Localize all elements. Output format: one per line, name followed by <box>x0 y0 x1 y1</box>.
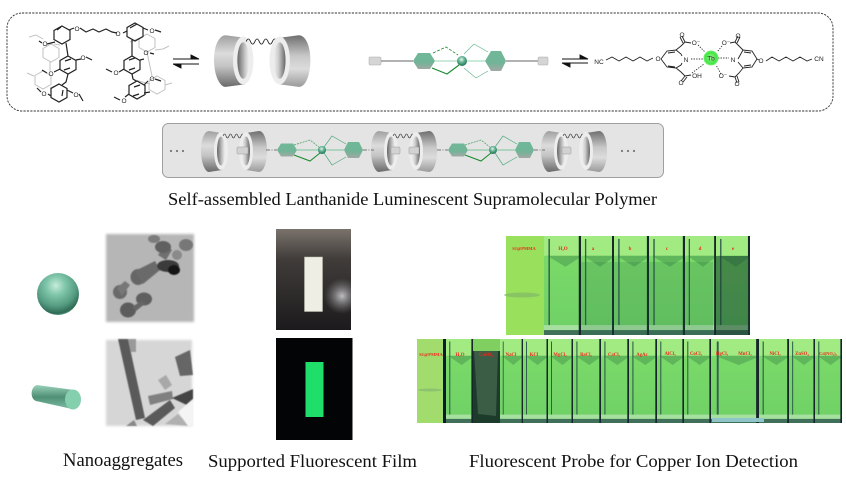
cuvette labels bottom: MgCl₂ <box>553 353 567 358</box>
label: probe: Fluorescent Probe for Copper Ion Detection <box>469 451 798 471</box>
panel: probe solvent photos <box>504 236 750 335</box>
pillararene structure: O <box>80 55 86 62</box>
TEM image: spherical aggregates <box>106 234 194 322</box>
terbium complex structure <box>594 32 824 88</box>
terbium complex structure: O <box>734 81 740 88</box>
terbium complex structure: O⁻ <box>692 40 701 47</box>
pillararene structure: O <box>115 31 121 38</box>
terbium complex structure: NC <box>594 59 604 66</box>
cuvette labels bottom: NiCl₂ <box>769 352 781 357</box>
terbium complex structure: O <box>678 80 684 87</box>
cuvette labels bottom: CaCl₂ <box>608 353 621 358</box>
photo: film under UV <box>276 338 352 440</box>
cuvette row top <box>544 236 750 335</box>
pillararene structure: O <box>143 50 149 57</box>
cuvette labels bottom: S1@PMMA <box>419 352 443 357</box>
cuvette labels bottom: BaCl₂ <box>580 353 592 358</box>
equilibrium arrow right <box>562 55 588 67</box>
heading: polymer: Self-assembled Lanthanide Luminescent Supramolecular Polymer <box>168 189 657 209</box>
cuvette labels top: S1@PMMA <box>512 246 536 251</box>
pillararene structure: O <box>113 70 119 77</box>
cuvette labels bottom: H₂O <box>456 353 465 358</box>
cuvette labels top: e <box>732 247 735 252</box>
ellipsis left <box>170 150 184 152</box>
cuvette labels top: H₂O <box>558 247 568 252</box>
cuvette labels top <box>512 246 735 252</box>
terbium complex structure: Tb <box>707 56 715 62</box>
terbium complex structure: N <box>731 57 736 64</box>
ring unit 3 <box>541 131 607 172</box>
cuvette labels bottom: Cd(NO₃)₂ <box>819 351 838 356</box>
terbium complex structure: CN <box>814 56 824 63</box>
terbium complex structure: O⁻ <box>722 40 731 47</box>
pillararene structure: O <box>48 71 54 78</box>
pillararene structure: O <box>73 92 79 99</box>
cuvette labels top: d <box>699 247 702 252</box>
cuvette labels bottom: MnCl₂ <box>738 352 752 357</box>
cuvette labels bottom: CoCl₂ <box>690 352 703 357</box>
panel: probe ion photos <box>417 339 842 423</box>
pillararene structure: O <box>42 41 48 48</box>
cuvette labels bottom: NaCl <box>506 353 517 358</box>
metal ligand link 1 <box>266 136 374 165</box>
pillararene structure: O <box>74 26 80 33</box>
label: film: Supported Fluorescent Film <box>208 451 417 471</box>
pillararene structure: O <box>121 98 127 105</box>
label: nanoaggregates: Nanoaggregates <box>63 451 183 471</box>
pillararene structure <box>27 23 172 105</box>
pillararene structure: O <box>149 28 155 35</box>
cuvette labels bottom: CuSO₄ <box>479 353 494 358</box>
terbium complex structure: O⁻ <box>719 73 728 80</box>
cuvette labels bottom: KCl <box>530 353 539 358</box>
terbium complex structure: N <box>684 57 689 64</box>
pillararene structure: O <box>41 91 47 98</box>
terbium complex structure: OH <box>692 73 702 80</box>
terbium complex structure: O <box>679 32 685 39</box>
cuvette labels bottom: AlCl₃ <box>664 352 676 357</box>
host ring cartoon <box>214 35 310 87</box>
pillararene structure: O <box>149 76 155 83</box>
guest cartoon <box>369 44 548 78</box>
cuvette labels top: c <box>666 247 669 252</box>
icon: rod <box>32 385 81 410</box>
cuvette labels bottom: ZnSO₄ <box>795 352 809 357</box>
terbium complex structure: O <box>655 56 661 63</box>
panel: molecular components (dashed box) <box>7 13 833 111</box>
equilibrium arrow left <box>173 55 199 68</box>
ring unit 2 <box>371 131 437 172</box>
cuvette labels top: a <box>592 247 595 252</box>
terbium complex structure: O <box>758 58 764 65</box>
cuvette labels bottom: HgCl₂ <box>716 352 729 357</box>
cuvette row bottom <box>446 339 842 423</box>
ring unit 1 <box>201 131 267 172</box>
photo: film under daylight <box>276 229 351 330</box>
TEM image: rod aggregates <box>106 339 193 426</box>
icon: sphere <box>37 273 79 315</box>
metal ligand link 2 <box>437 136 545 165</box>
terbium complex structure: O <box>735 33 741 40</box>
cuvette labels bottom: AgAc <box>636 353 649 358</box>
cuvette labels top: b <box>629 247 632 252</box>
stoppers <box>237 147 571 154</box>
panel: supramolecular polymer chain <box>162 124 664 178</box>
cuvette labels bottom <box>419 351 838 358</box>
ellipsis right <box>621 150 635 152</box>
